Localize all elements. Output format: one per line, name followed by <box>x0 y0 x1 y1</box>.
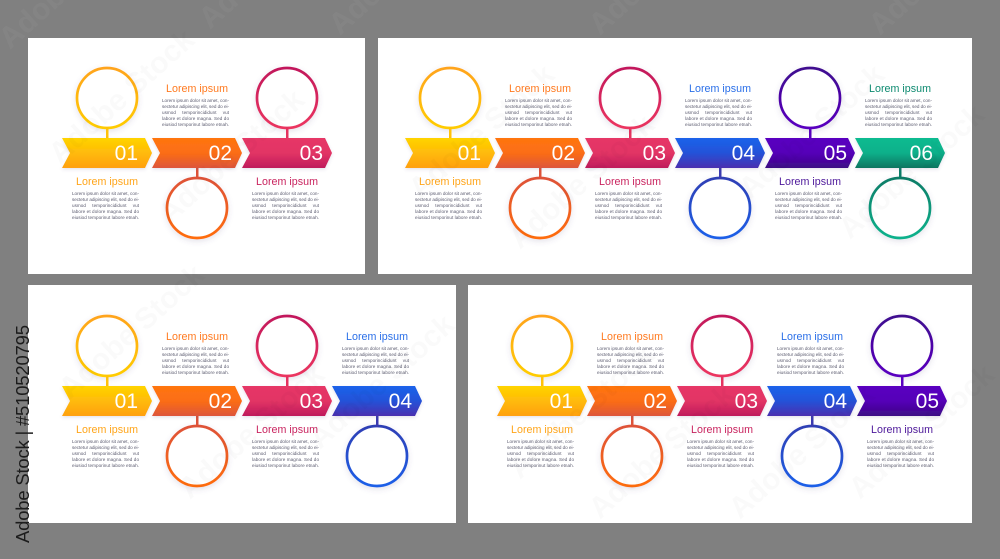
panel: six-step timeline <box>378 38 972 274</box>
connector 02 <box>539 168 542 179</box>
text block 03: labore et dolore magna. Sed do <box>687 457 754 462</box>
heading 04: Lorem ipsum <box>689 83 751 95</box>
text block 01: eiusiod temporinut labore etnah. <box>507 463 574 468</box>
text block 02: labore et dolore magna. Sed do <box>505 116 572 121</box>
text block 04: labore et dolore magna. Sed do <box>342 364 409 369</box>
text block 02: eiusiod temporinut labore etnah. <box>597 370 664 375</box>
text block 04: labore et dolore magna. Sed do <box>777 364 844 369</box>
text block 04: eiusiod temporinut labore etnah. <box>685 122 752 127</box>
text block 06: sectetur adipiscing elit, sed do ei- <box>865 104 932 109</box>
circle 02 <box>167 426 227 486</box>
step 04 <box>767 331 857 486</box>
text block 02: sectetur adipiscing elit, sed do ei- <box>162 104 229 109</box>
text block 02: labore et dolore magna. Sed do <box>162 364 229 369</box>
text block 05: usmod temporincididunt vut <box>775 203 843 208</box>
text block 06: eiusiod temporinut labore etnah. <box>865 122 932 127</box>
text block 05: sectetur adipiscing elit, sed do ei- <box>867 445 934 450</box>
connector 04 <box>811 416 814 427</box>
text block 03: eiusiod temporinut labore etnah. <box>252 463 319 468</box>
text block 04: eiusiod temporinut labore etnah. <box>777 370 844 375</box>
text block 01: eiusiod temporinut labore etnah. <box>72 215 139 220</box>
arrow 02 <box>152 138 242 168</box>
text block 02 <box>162 346 230 375</box>
circle 03 <box>600 68 660 128</box>
number 03: 03 <box>735 390 758 413</box>
text block 04: usmod temporincididunt vut <box>685 110 753 115</box>
text block 01: eiusiod temporinut labore etnah. <box>415 215 482 220</box>
text block 06: labore et dolore magna. Sed do <box>865 116 932 121</box>
text block 03: Lorem ipsum dolor sit amet, con- <box>595 191 662 196</box>
text block 01: Lorem ipsum dolor sit amet, con- <box>72 439 139 444</box>
step 02 <box>152 331 242 486</box>
text block 01: usmod temporincididunt vut <box>72 203 140 208</box>
heading 01: Lorem ipsum <box>419 176 481 188</box>
number 01: 01 <box>115 142 138 165</box>
text block 04: Lorem ipsum dolor sit amet, con- <box>685 98 752 103</box>
circle 04 <box>347 426 407 486</box>
connector 03 <box>629 127 632 138</box>
step 03 <box>242 68 332 220</box>
text block 01: labore et dolore magna. Sed do <box>72 457 139 462</box>
text block 02: sectetur adipiscing elit, sed do ei- <box>162 352 229 357</box>
heading 02: Lorem ipsum <box>166 83 228 95</box>
text block 01: labore et dolore magna. Sed do <box>507 457 574 462</box>
text block 03: eiusiod temporinut labore etnah. <box>687 463 754 468</box>
text block 01 <box>72 439 140 468</box>
connector 01 <box>449 127 452 138</box>
arrow 02 <box>587 386 677 416</box>
connector 02 <box>631 416 634 427</box>
circle 01 <box>77 316 137 376</box>
text block 02: Lorem ipsum dolor sit amet, con- <box>505 98 572 103</box>
heading 05: Lorem ipsum <box>779 176 841 188</box>
arrow 01 <box>62 138 152 168</box>
circle 01 <box>77 68 137 128</box>
text block 04: sectetur adipiscing elit, sed do ei- <box>777 352 844 357</box>
step 02 <box>495 83 585 238</box>
text block 04: usmod temporincididunt vut <box>777 358 845 363</box>
text block 02: eiusiod temporinut labore etnah. <box>505 122 572 127</box>
text block 02: Lorem ipsum dolor sit amet, con- <box>162 346 229 351</box>
step 02 <box>152 83 242 238</box>
step 04 <box>332 331 422 486</box>
circle 05 <box>872 316 932 376</box>
arrow 03 <box>585 138 675 168</box>
step 01 <box>497 316 587 468</box>
step 03 <box>585 68 675 220</box>
connector 03 <box>721 375 724 386</box>
circle 06 <box>870 178 930 238</box>
text block 01: usmod temporincididunt vut <box>72 451 140 456</box>
step 01 <box>405 68 495 220</box>
heading 03: Lorem ipsum <box>256 176 318 188</box>
text block 03: Lorem ipsum dolor sit amet, con- <box>687 439 754 444</box>
circle 03 <box>257 316 317 376</box>
heading 04: Lorem ipsum <box>346 331 408 343</box>
text block 01: Lorem ipsum dolor sit amet, con- <box>415 191 482 196</box>
text block 02: labore et dolore magna. Sed do <box>162 116 229 121</box>
text block 01: sectetur adipiscing elit, sed do ei- <box>415 197 482 202</box>
text block 01 <box>415 191 483 220</box>
text block 01: sectetur adipiscing elit, sed do ei- <box>72 445 139 450</box>
step 06 <box>855 83 945 238</box>
text block 03: sectetur adipiscing elit, sed do ei- <box>687 445 754 450</box>
text block 01: eiusiod temporinut labore etnah. <box>72 463 139 468</box>
step 02 <box>587 331 677 486</box>
circle 05 <box>780 68 840 128</box>
text block 03 <box>595 191 663 220</box>
heading 02: Lorem ipsum <box>509 83 571 95</box>
arrow 05 <box>857 386 947 416</box>
heading 06: Lorem ipsum <box>869 83 931 95</box>
text block 01: usmod temporincididunt vut <box>507 451 575 456</box>
number 04: 04 <box>824 390 847 413</box>
number 03: 03 <box>643 142 666 165</box>
number 06: 06 <box>910 142 933 165</box>
text block 03: usmod temporincididunt vut <box>252 203 320 208</box>
arrow 03 <box>242 138 332 168</box>
text block 03: usmod temporincididunt vut <box>595 203 663 208</box>
heading 01: Lorem ipsum <box>76 424 138 436</box>
connector 04 <box>376 416 378 427</box>
number 05: 05 <box>824 142 847 165</box>
text block 03: labore et dolore magna. Sed do <box>252 209 319 214</box>
vertical stock id label: Adobe Stock | #510520795 <box>12 325 33 543</box>
arrow 03 <box>242 386 332 416</box>
circle 01 <box>512 316 572 376</box>
connector 04 <box>719 168 722 179</box>
text block 05 <box>775 191 843 220</box>
arrow 03 <box>677 386 767 416</box>
heading 01: Lorem ipsum <box>76 176 138 188</box>
step 05 <box>857 316 947 468</box>
number 01: 01 <box>115 390 138 413</box>
connector 01 <box>106 127 108 138</box>
connector 03 <box>286 375 288 386</box>
text block 05: labore et dolore magna. Sed do <box>775 209 842 214</box>
connector 05 <box>809 127 812 138</box>
text block 03 <box>252 439 320 468</box>
text block 01: labore et dolore magna. Sed do <box>415 209 482 214</box>
heading 02: Lorem ipsum <box>601 331 663 343</box>
circle 02 <box>167 178 227 238</box>
text block 04: usmod temporincididunt vut <box>342 358 410 363</box>
number 03: 03 <box>300 142 323 165</box>
step 01 <box>62 68 152 220</box>
text block 06: usmod temporincididunt vut <box>865 110 933 115</box>
arrow 06 <box>855 138 945 168</box>
number 01: 01 <box>458 142 481 165</box>
circle 04 <box>690 178 750 238</box>
step 01 <box>62 316 152 468</box>
number 02: 02 <box>552 142 575 165</box>
text block 04 <box>685 98 753 127</box>
text block 01: Lorem ipsum dolor sit amet, con- <box>72 191 139 196</box>
text block 05: eiusiod temporinut labore etnah. <box>867 463 934 468</box>
connector 01 <box>541 375 544 386</box>
heading 01: Lorem ipsum <box>511 424 573 436</box>
heading 03: Lorem ipsum <box>691 424 753 436</box>
text block 06: Lorem ipsum dolor sit amet, con- <box>865 98 932 103</box>
connector 05 <box>901 375 904 386</box>
arrow 01 <box>62 386 152 416</box>
number 05: 05 <box>916 390 939 413</box>
number 04: 04 <box>732 142 755 165</box>
text block 03: labore et dolore magna. Sed do <box>595 209 662 214</box>
number 02: 02 <box>644 390 667 413</box>
text block 02: eiusiod temporinut labore etnah. <box>162 370 229 375</box>
number 02: 02 <box>209 142 232 165</box>
text block 02: labore et dolore magna. Sed do <box>597 364 664 369</box>
text block 05: labore et dolore magna. Sed do <box>867 457 934 462</box>
text block 05: usmod temporincididunt vut <box>867 451 935 456</box>
number 04: 04 <box>389 390 412 413</box>
arrow 05 <box>765 138 855 168</box>
panel: four-step timeline <box>28 285 456 523</box>
text block 03: usmod temporincididunt vut <box>687 451 755 456</box>
text block 03: Lorem ipsum dolor sit amet, con- <box>252 191 319 196</box>
text block 03: sectetur adipiscing elit, sed do ei- <box>252 197 319 202</box>
text block 04: Lorem ipsum dolor sit amet, con- <box>777 346 844 351</box>
text block 04: sectetur adipiscing elit, sed do ei- <box>685 104 752 109</box>
text block 04: eiusiod temporinut labore etnah. <box>342 370 409 375</box>
connector 02 <box>196 416 198 427</box>
text block 05: Lorem ipsum dolor sit amet, con- <box>775 191 842 196</box>
arrow 04 <box>675 138 765 168</box>
text block 02 <box>162 98 230 127</box>
circle 02 <box>602 426 662 486</box>
text block 02: sectetur adipiscing elit, sed do ei- <box>505 104 572 109</box>
text block 05: Lorem ipsum dolor sit amet, con- <box>867 439 934 444</box>
heading 02: Lorem ipsum <box>166 331 228 343</box>
text block 03: labore et dolore magna. Sed do <box>252 457 319 462</box>
step 03 <box>677 316 767 468</box>
step 05 <box>765 68 855 220</box>
text block 02 <box>597 346 665 375</box>
text block 01: sectetur adipiscing elit, sed do ei- <box>72 197 139 202</box>
arrow 01 <box>497 386 587 416</box>
text block 03: sectetur adipiscing elit, sed do ei- <box>595 197 662 202</box>
text block 02: sectetur adipiscing elit, sed do ei- <box>597 352 664 357</box>
number 02: 02 <box>209 390 232 413</box>
text block 03: eiusiod temporinut labore etnah. <box>595 215 662 220</box>
text block 03: usmod temporincididunt vut <box>252 451 320 456</box>
arrow 02 <box>495 138 585 168</box>
circle 04 <box>782 426 842 486</box>
connector 02 <box>196 168 198 179</box>
text block 05: eiusiod temporinut labore etnah. <box>775 215 842 220</box>
connector 03 <box>286 127 288 138</box>
text block 06 <box>865 98 933 127</box>
heading 04: Lorem ipsum <box>781 331 843 343</box>
arrow 01 <box>405 138 495 168</box>
heading 03: Lorem ipsum <box>256 424 318 436</box>
arrow 04 <box>332 386 422 416</box>
circle 02 <box>510 178 570 238</box>
heading 03: Lorem ipsum <box>599 176 661 188</box>
text block 02: usmod temporincididunt vut <box>597 358 665 363</box>
connector 01 <box>106 375 108 386</box>
text block 01: labore et dolore magna. Sed do <box>72 209 139 214</box>
text block 01 <box>72 191 140 220</box>
circle 01 <box>420 68 480 128</box>
connector 06 <box>899 168 902 179</box>
text block 04: labore et dolore magna. Sed do <box>685 116 752 121</box>
text block 04: Lorem ipsum dolor sit amet, con- <box>342 346 409 351</box>
text block 02: usmod temporincididunt vut <box>505 110 573 115</box>
panel: three-step timeline <box>28 38 365 274</box>
text block 03: eiusiod temporinut labore etnah. <box>252 215 319 220</box>
text block 02: usmod temporincididunt vut <box>162 358 230 363</box>
arrow 02 <box>152 386 242 416</box>
text block 02 <box>505 98 573 127</box>
text block 01: sectetur adipiscing elit, sed do ei- <box>507 445 574 450</box>
text block 03 <box>687 439 755 468</box>
text block 05: sectetur adipiscing elit, sed do ei- <box>775 197 842 202</box>
text block 02: Lorem ipsum dolor sit amet, con- <box>597 346 664 351</box>
text block 01: usmod temporincididunt vut <box>415 203 483 208</box>
number 03: 03 <box>300 390 323 413</box>
text block 02: Lorem ipsum dolor sit amet, con- <box>162 98 229 103</box>
text block 04 <box>342 346 410 375</box>
text block 04: sectetur adipiscing elit, sed do ei- <box>342 352 409 357</box>
text block 03: Lorem ipsum dolor sit amet, con- <box>252 439 319 444</box>
text block 03: sectetur adipiscing elit, sed do ei- <box>252 445 319 450</box>
heading 05: Lorem ipsum <box>871 424 933 436</box>
panel: five-step timeline <box>468 285 972 523</box>
text block 03 <box>252 191 320 220</box>
circle 03 <box>692 316 752 376</box>
step 03 <box>242 316 332 468</box>
text block 04 <box>777 346 845 375</box>
step 04 <box>675 83 765 238</box>
text block 05 <box>867 439 935 468</box>
text block 02: eiusiod temporinut labore etnah. <box>162 122 229 127</box>
circle 03 <box>257 68 317 128</box>
text block 01: Lorem ipsum dolor sit amet, con- <box>507 439 574 444</box>
text block 02: usmod temporincididunt vut <box>162 110 230 115</box>
text block 01 <box>507 439 575 468</box>
number 01: 01 <box>550 390 573 413</box>
arrow 04 <box>767 386 857 416</box>
